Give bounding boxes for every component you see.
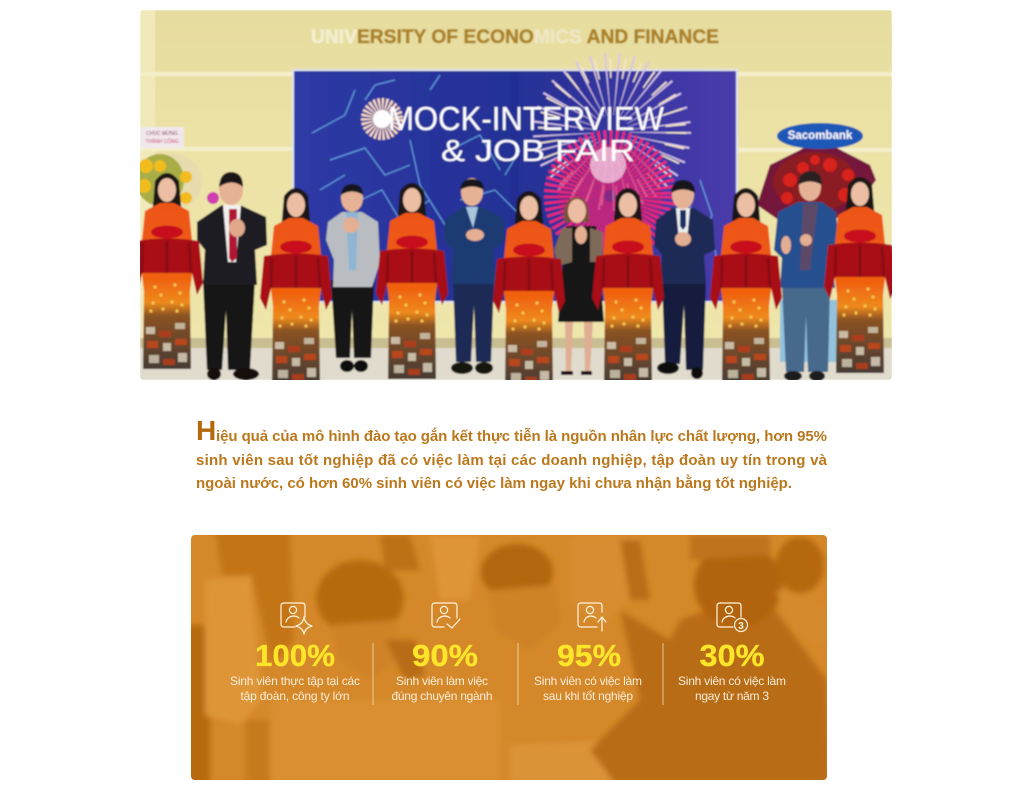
drop cap: H bbox=[196, 415, 216, 446]
icon: person with check bbox=[432, 603, 460, 628]
stat: 90%: Sinh viên làm việc bbox=[396, 674, 488, 688]
infographic page bbox=[140, 10, 892, 780]
sacombank flower stand: Sacombank bbox=[788, 130, 853, 142]
panel photo background bbox=[180, 530, 830, 790]
man in blue blazer and jeans bbox=[774, 171, 839, 381]
stat: 95%: sau khi tốt nghiệp bbox=[543, 689, 633, 703]
event photo: ribbon cutting at job fair bbox=[131, 10, 896, 387]
sacombank flower stand bbox=[757, 123, 876, 228]
stat: 100% bbox=[230, 603, 360, 703]
stat: 95% bbox=[534, 603, 642, 703]
stat: 30%: 30% bbox=[700, 638, 764, 673]
intro paragraph: sinh viên sau tốt nghiệp đã có việc làm tại các doanh nghiệp, tập đoàn uy tín trong và bbox=[196, 452, 828, 469]
panel: employment statistics bbox=[180, 530, 830, 790]
women in ao dai holding ribbon bbox=[131, 173, 896, 387]
man in dark navy suit with glasses bbox=[654, 180, 715, 379]
stat: 95%: Sinh viên có việc làm bbox=[534, 674, 642, 688]
icon: person with up arrow bbox=[578, 603, 606, 631]
man in black suit bbox=[197, 172, 267, 380]
stat: 30%: Sinh viên có việc làm bbox=[678, 674, 786, 688]
dividers bbox=[373, 643, 663, 705]
wall sign lettering: UNIVERSITY OF ECONOMICS AND FINANCE bbox=[311, 27, 719, 48]
intro paragraph: ngoài nước, có hơn 60% sinh viên có việc làm ngay khi chưa nhận bằng tốt nghiệp. bbox=[196, 474, 792, 492]
stat: 100%: Sinh viên thực tập tại các bbox=[230, 674, 360, 688]
left congratulation flowers bbox=[136, 127, 219, 210]
man in navy suit bbox=[444, 178, 505, 374]
left congratulation flowers: CHÚC MỪNG bbox=[146, 130, 178, 137]
stat: 90%: 90% bbox=[412, 638, 478, 673]
left congratulation flowers: THÀNH CÔNG bbox=[145, 138, 179, 145]
screen title: MOCK-INTERVIEW bbox=[388, 100, 665, 137]
icon: person with number 3 bbox=[717, 603, 748, 632]
stat: 100%: 100% bbox=[255, 638, 335, 673]
wall background bbox=[154, 10, 892, 339]
man in grey jacket bbox=[326, 184, 380, 372]
intro paragraph: iệu quả của mô hình đào tạo gắn kết thực tiễn là nguồn nhân lực chất lượng, hơn 95% bbox=[216, 427, 827, 445]
stat: 30%: 3 bbox=[738, 621, 744, 632]
intro paragraph bbox=[196, 415, 828, 492]
woman in black dress bbox=[554, 197, 604, 373]
icon: person with sparkle bbox=[281, 603, 312, 634]
stat: 95%: 95% bbox=[557, 638, 621, 673]
led screen bbox=[292, 68, 738, 303]
stat: 100%: tập đoàn, công ty lớn bbox=[240, 689, 350, 703]
led screen: & JOB FAIR bbox=[441, 133, 635, 168]
stat: 90% bbox=[392, 603, 492, 703]
stat: 30%: ngay từ năm 3 bbox=[695, 689, 769, 703]
stat: 30% bbox=[678, 603, 786, 703]
stat: 90%: đúng chuyên ngành bbox=[392, 689, 492, 703]
